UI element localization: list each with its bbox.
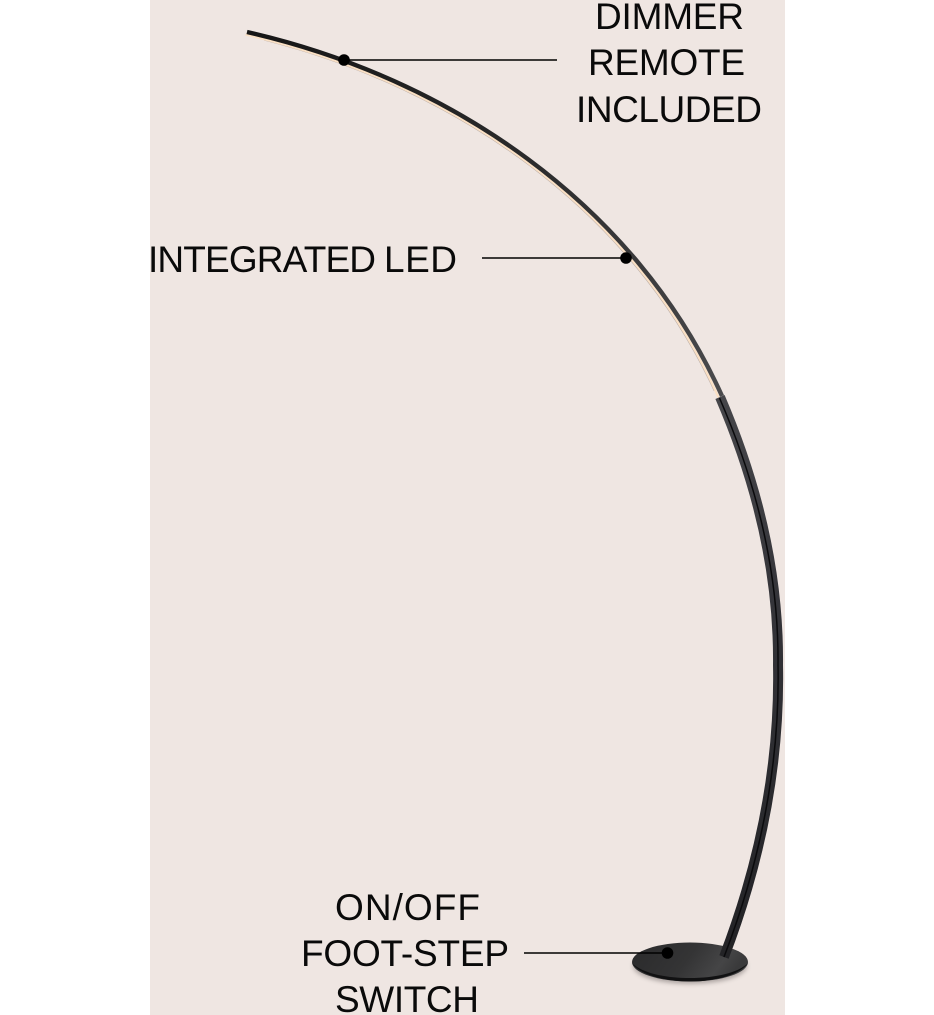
marker dot — [620, 252, 632, 264]
upper arm — [247, 32, 722, 396]
lower arm — [720, 397, 778, 957]
label: FOOT-STEP — [301, 933, 509, 974]
LED diffuser edge — [245, 35, 718, 398]
label — [576, 0, 762, 130]
label: ON/OFF — [335, 887, 480, 928]
base shadow — [633, 948, 747, 984]
label: INCLUDED — [576, 89, 762, 130]
lower arm centre line — [720, 398, 778, 957]
leader line — [482, 257, 626, 259]
marker dot — [662, 947, 673, 959]
label: INTEGRATED — [148, 239, 376, 280]
LED strip glow — [246, 35, 718, 398]
callout: dimmer remote — [338, 0, 762, 130]
base lower rim — [632, 963, 748, 982]
background panel — [150, 0, 785, 1015]
leader line — [344, 59, 557, 61]
marker dot — [338, 54, 350, 66]
label: REMOTE — [588, 42, 745, 83]
callout: foot-step switch — [301, 887, 673, 1015]
round base — [632, 942, 748, 982]
floor lamp — [245, 32, 778, 984]
leader line — [524, 952, 667, 954]
callout: integrated LED — [148, 239, 632, 280]
label: LED — [384, 239, 457, 280]
label — [301, 887, 509, 1015]
